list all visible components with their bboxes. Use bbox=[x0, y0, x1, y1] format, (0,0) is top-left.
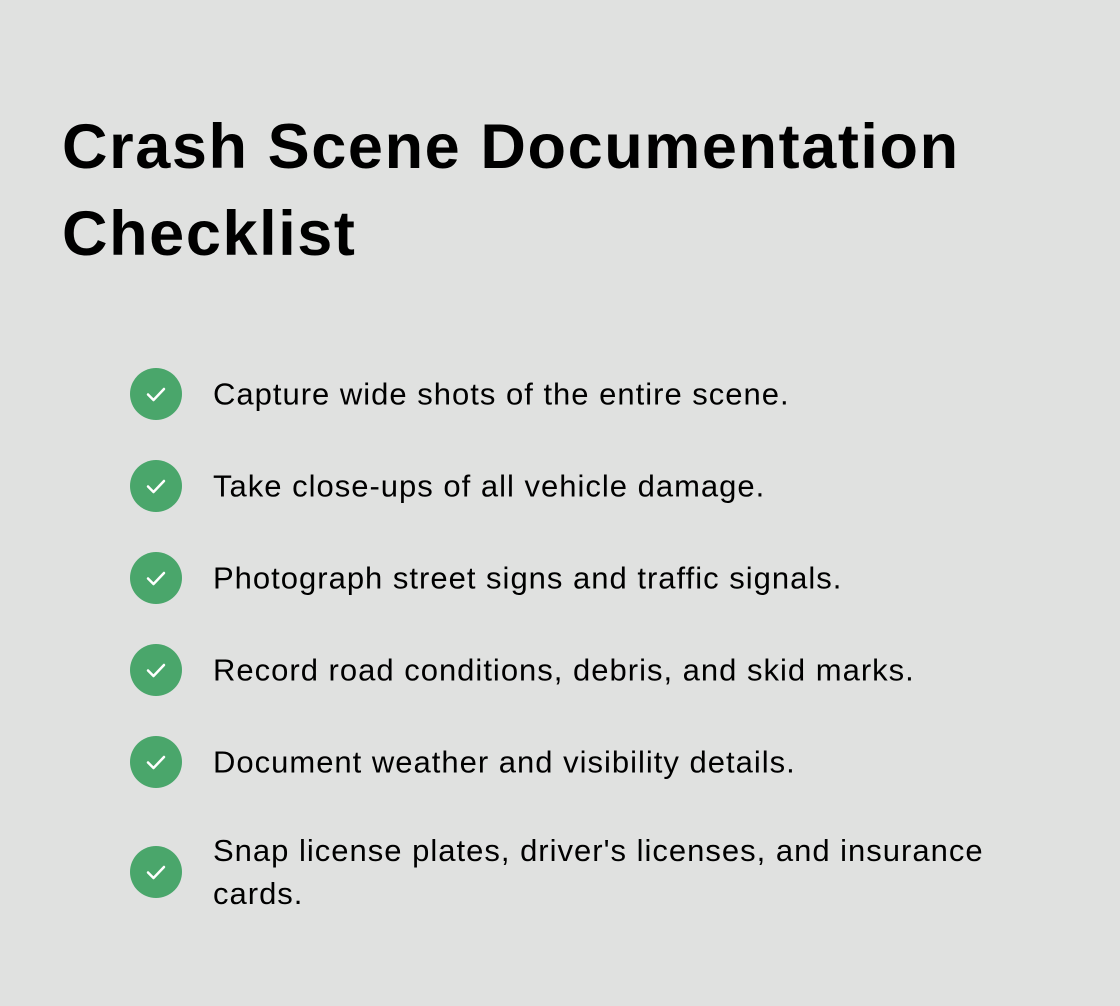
item 6: cards. bbox=[213, 876, 303, 911]
item 2: Take close-ups of all vehicle damage. bbox=[213, 468, 765, 504]
title bbox=[62, 112, 960, 269]
item 4 bbox=[130, 644, 915, 696]
title: Crash Scene Documentation bbox=[62, 112, 960, 182]
item 1: Capture wide shots of the entire scene. bbox=[213, 376, 790, 412]
item 5: Document weather and visibility details. bbox=[213, 744, 796, 780]
item 6: Snap license plates, driver's licenses, and insurance bbox=[213, 833, 984, 868]
item 3: Photograph street signs and traffic signals. bbox=[213, 560, 842, 596]
item 4: Record road conditions, debris, and skid marks. bbox=[213, 652, 915, 688]
item 3 bbox=[130, 552, 842, 604]
item 6 bbox=[130, 833, 984, 911]
item 2 bbox=[130, 460, 765, 512]
item 5 bbox=[130, 736, 796, 788]
title: Checklist bbox=[62, 199, 357, 269]
item 1 bbox=[130, 368, 790, 420]
